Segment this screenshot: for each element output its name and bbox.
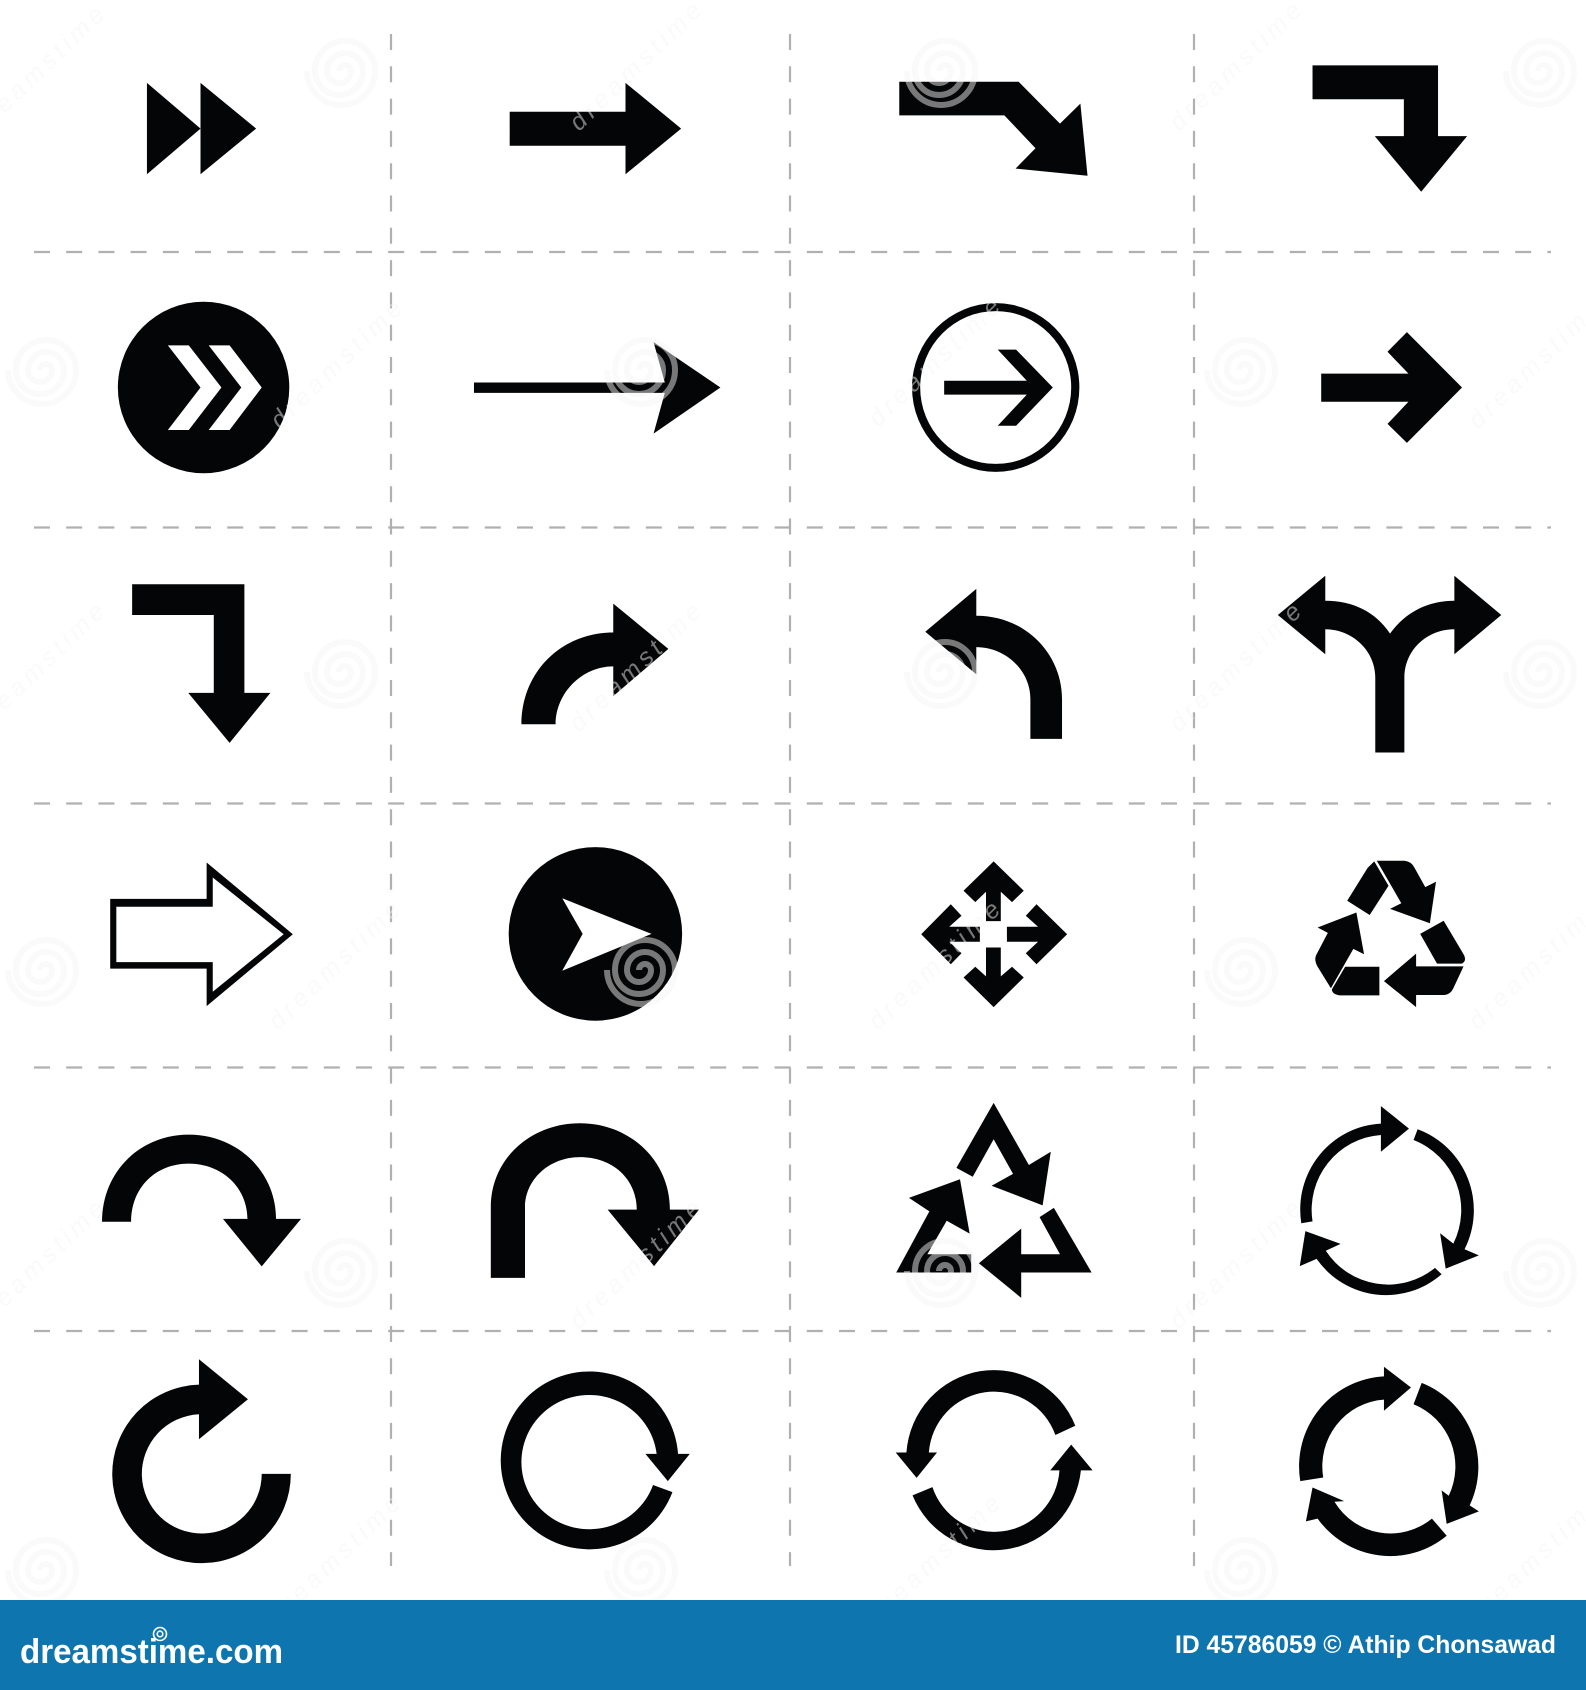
icon: curved arrow turning left xyxy=(925,589,1062,739)
icon: long thin arrow right xyxy=(474,342,720,434)
icon: arc arrow over and down xyxy=(102,1135,301,1266)
watermark: spirals and diagonal wordmarks: dreamstime xyxy=(1164,1195,1307,1334)
icon: two-arrow circular cycle xyxy=(896,1370,1093,1550)
watermark: spirals and diagonal wordmarks: dreamstime xyxy=(1164,0,1307,136)
icon: thick three-arrow circle xyxy=(1299,1367,1479,1556)
watermark: spirals and diagonal wordmarks: dreamstime xyxy=(863,1490,1006,1629)
icon: block arrow right xyxy=(510,83,681,174)
icon: circle with navigation pointer xyxy=(509,847,682,1021)
icon: outlined block arrow xyxy=(110,862,293,1006)
watermark: spirals and diagonal wordmarks: dreamstime xyxy=(1164,598,1307,737)
icon: four-way move arrows xyxy=(921,861,1067,1007)
icon: elbow arrow down, tall xyxy=(132,584,270,743)
icon: brand spiral xyxy=(154,1628,166,1640)
icon: circular arrow with small head xyxy=(501,1371,690,1549)
icon: clockwise refresh arrow, large xyxy=(112,1359,291,1563)
watermark: spirals and diagonal wordmarks: dreamstime xyxy=(263,896,406,1035)
icon: fast-forward double triangle xyxy=(147,83,256,174)
watermark: spirals and diagonal wordmarks: dreamstime xyxy=(564,0,707,136)
icon: forked arrow left and right xyxy=(1278,576,1501,752)
icon: recycling symbol with folded bands xyxy=(1315,861,1465,1007)
watermark: spirals and diagonal wordmarks: dreamstime xyxy=(265,295,408,434)
brand wordmark: dreamstime.com xyxy=(20,1633,283,1671)
icon: curved arrow turning right xyxy=(521,604,668,724)
watermark: spirals and diagonal wordmarks: dreamstime xyxy=(863,293,1006,432)
watermark: spirals and diagonal wordmarks: dreamstime xyxy=(564,598,707,737)
icon: triangular three-arrow cycle xyxy=(896,1103,1092,1298)
icon: U-turn arrow xyxy=(491,1123,699,1278)
watermark: spirals and diagonal wordmarks: dreamstime xyxy=(863,896,1006,1035)
watermark: spirals and diagonal wordmarks: dreamstime xyxy=(263,1490,406,1629)
footer banner xyxy=(0,1600,1586,1690)
watermark: spirals and diagonal wordmarks: dreamstime xyxy=(564,1195,707,1334)
icon: thin three-arrow circle xyxy=(1300,1106,1479,1295)
icon: bent arrow down-right xyxy=(899,82,1088,176)
icon: elbow arrow down xyxy=(1313,65,1467,192)
image credit: ID 45786059 © Athip Chonsawad xyxy=(1175,1631,1556,1659)
icon: short bold arrow right xyxy=(1321,332,1462,443)
icon: circle with double chevron xyxy=(118,302,289,473)
icon: outlined circle with arrow xyxy=(912,303,1079,472)
